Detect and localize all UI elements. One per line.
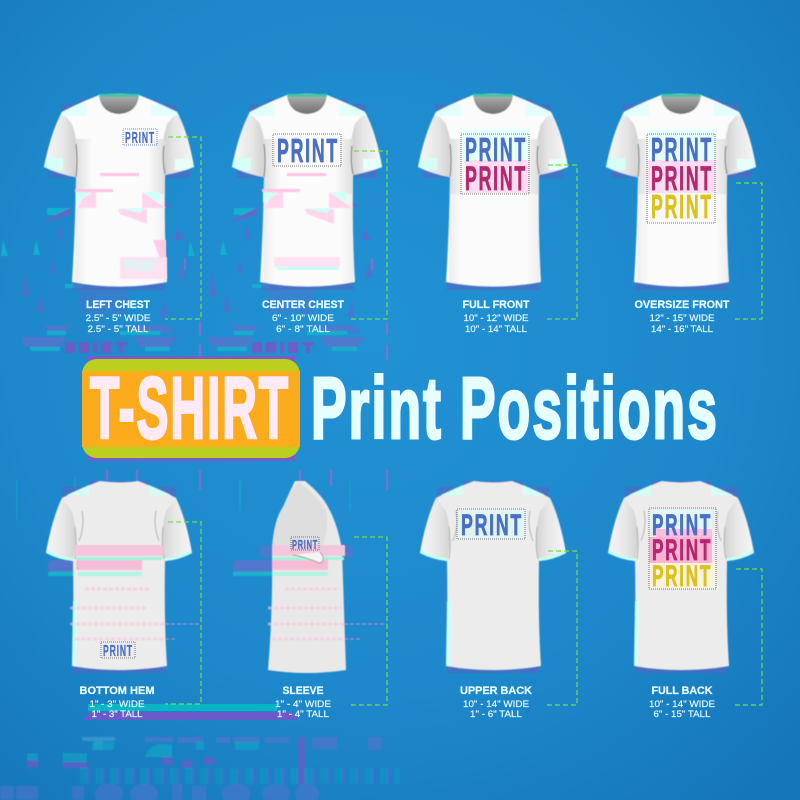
label: sleeve: 1" - 4" TALL [277,709,329,720]
label: full front: 10" - 12" WIDE [464,313,528,324]
print area: upper back [457,509,525,542]
artefact bars under bottom-row sizes [83,704,298,720]
artefacts on center chest shirt [262,173,353,270]
print area: full front: PRINT [465,131,527,168]
label: center chest: 6" - 10" WIDE [272,313,334,324]
print area: full front [461,129,529,198]
label: left chest [86,299,150,335]
title [82,356,719,461]
print area: oversize front [647,129,715,225]
label: center chest [262,299,344,335]
label: full back: 10" - 14" WIDE [649,699,715,710]
title badge [82,356,300,461]
print area: sleeve [291,537,319,552]
shirt: oversize front [603,94,759,290]
print area: oversize front: PRINT [651,188,713,225]
label: full back [649,685,715,720]
label: left chest: 2.5" - 5" WIDE [86,313,150,324]
label: bottom hem: 1" - 3" TALL [92,709,142,720]
title text: T-SHIRT: T-SHIRT [90,360,290,457]
print area: full back: PRINT [652,560,712,593]
print area: oversize front: PRINT [651,160,713,198]
print area: full front: PRINT [465,160,527,198]
label: oversize front: 14" - 16" TALL [651,324,713,335]
label: full front: FULL FRONT [462,299,530,311]
ghost title at page bottom [0,737,400,800]
leader: oversize front [733,183,762,319]
shirt: bottom hem [46,481,200,673]
print area: left chest: PRINT [125,130,155,147]
artefacts on bottom hem shirt [70,545,200,639]
label: sleeve: SLEEVE [282,685,324,697]
print area: left chest [123,129,157,147]
label: oversize front [634,299,730,335]
print area: full back: PRINT [652,534,712,567]
print area: upper back: PRINT [461,509,523,542]
leader: full front [547,165,577,319]
label: left chest: LEFT CHEST [86,299,150,311]
label: center chest: 6" - 8" TALL [276,324,330,335]
leader: upper back [547,551,577,705]
shirt: center chest [229,94,385,290]
label: center chest: CENTER CHEST [262,299,344,311]
print area: center chest [273,132,341,169]
sleeve view garment [268,481,387,673]
label: upper back [460,685,532,720]
label: bottom hem: 1" - 3" WIDE [90,699,144,710]
label: full front: 10" - 14" TALL [465,324,527,335]
label: left chest: 2.5" - 5" TALL [88,324,148,335]
artefacts on left chest shirt [75,173,167,279]
shirt: sleeve [268,481,387,673]
label: oversize front: 12" - 15" WIDE [650,313,714,324]
shirt: left chest [41,94,197,290]
print area: bottom hem: PRINT [103,643,133,660]
print area: sleeve: PRINT [292,537,318,552]
shirt: full front [415,94,571,290]
label: full front [462,299,530,335]
leader: bottom hem [165,522,201,704]
leader: full back [733,569,762,705]
leader: left chest [165,137,201,319]
label: sleeve: 1" - 4" WIDE [275,699,331,710]
print area: full back: PRINT [652,509,712,542]
label: oversize front: OVERSIZE FRONT [634,299,730,311]
shirt: upper back [420,481,566,673]
label: bottom hem [80,685,154,720]
print area: full back [649,508,716,593]
label: bottom hem: BOTTOM HEM [80,685,154,697]
print area: oversize front: PRINT [651,131,713,168]
print area: bottom hem [101,642,135,660]
label: upper back: UPPER BACK [460,685,532,697]
leader: sleeve [351,537,387,705]
leader: center chest [351,151,387,319]
compression artefacts: ghost layer [1,192,387,576]
label: full back: FULL BACK [652,685,713,697]
shirt: full back [608,481,754,673]
label: upper back: 1" - 6" TALL [470,709,522,720]
label: full back: 6" - 15" TALL [654,709,710,720]
print area: center chest: PRINT [277,132,339,169]
label: sleeve [275,685,331,720]
artefacts on left chest shirt: PRINT [125,258,157,275]
label: upper back: 10" - 14" WIDE [463,699,529,710]
